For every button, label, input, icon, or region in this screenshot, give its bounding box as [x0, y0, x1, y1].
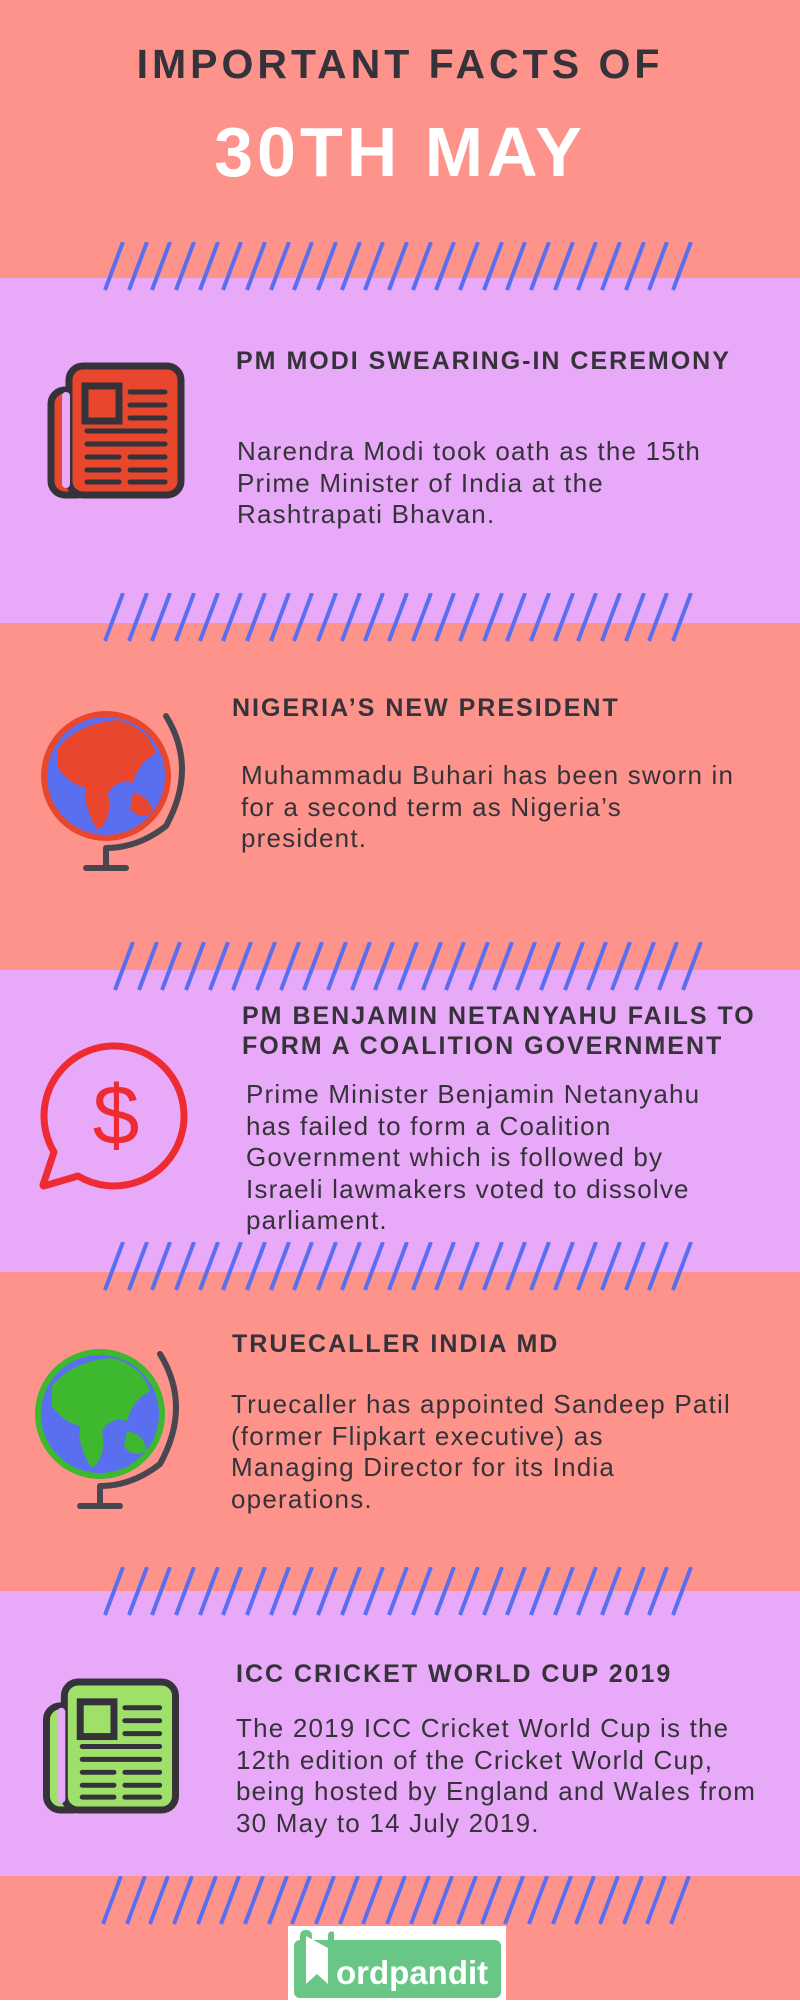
title line 1: IMPORTANT FACTS OF: [137, 41, 663, 87]
text: (former Flipkart executive) as: [231, 1420, 604, 1450]
panel: PM Modi: [48, 347, 731, 529]
text: has failed to form a Coalition: [246, 1110, 612, 1140]
text: [241, 760, 734, 853]
text: [236, 1713, 756, 1838]
text: [246, 1079, 700, 1235]
text: 30 May to 14 July 2019.: [236, 1808, 540, 1838]
panel: Nigeria: [41, 694, 734, 871]
title: [137, 41, 663, 191]
text: The 2019 ICC Cricket World Cup is the: [236, 1713, 729, 1743]
text: for a second term as Nigeria’s: [241, 792, 622, 822]
text: president.: [241, 823, 367, 853]
text: [237, 436, 701, 529]
text: Rashtrapati Bhavan.: [237, 499, 495, 529]
text: operations.: [231, 1484, 373, 1514]
text: Government which is followed by: [246, 1142, 663, 1172]
icon: newspaper green: [43, 1678, 179, 1814]
hatch divider 5: [103, 1567, 693, 1616]
text: Israeli lawmakers voted to dissolve: [246, 1174, 690, 1204]
icon: newspaper red: [48, 362, 184, 498]
logo: wordpandit: ordpandit: [336, 1954, 488, 1991]
hatch divider 2: [103, 593, 693, 642]
heading: NIGERIA’S NEW PRESIDENT: [232, 694, 620, 722]
text: parliament.: [246, 1205, 388, 1235]
text: Truecaller has appointed Sandeep Patil: [231, 1389, 731, 1419]
text: Prime Minister Benjamin Netanyahu: [246, 1079, 700, 1109]
text: Managing Director for its India: [231, 1452, 615, 1482]
heading: [242, 1002, 756, 1060]
text: [231, 1389, 731, 1514]
icon: dollar speech bubble: $: [93, 1068, 139, 1162]
text: being hosted by England and Wales from: [236, 1776, 756, 1806]
text: Narendra Modi took oath as the 15th: [237, 436, 701, 466]
icon: globe green: [35, 1349, 179, 1509]
hatch divider 1: [103, 242, 693, 291]
panel: ICC World Cup: [43, 1660, 756, 1838]
logo: wordpandit: [288, 1926, 506, 2000]
panel: Truecaller: [35, 1330, 731, 1514]
icon: globe red: [41, 711, 185, 871]
text: Prime Minister of India at the: [237, 468, 604, 498]
hatch divider 6: [101, 1876, 691, 1925]
hatch divider 4: [103, 1242, 693, 1291]
text: 12th edition of the Cricket World Cup,: [236, 1744, 713, 1774]
icon: dollar speech bubble: [40, 1042, 188, 1190]
heading: FORM A COALITION GOVERNMENT: [242, 1032, 723, 1060]
title date: 30TH MAY: [214, 113, 586, 191]
text: Muhammadu Buhari has been sworn in: [241, 760, 734, 790]
heading: TRUECALLER INDIA MD: [232, 1330, 559, 1358]
heading: PM BENJAMIN NETANYAHU FAILS TO: [242, 1002, 756, 1030]
heading: ICC CRICKET WORLD CUP 2019: [236, 1660, 672, 1688]
panel: Netanyahu: [40, 1002, 756, 1235]
heading: PM MODI SWEARING-IN CEREMONY: [236, 347, 731, 375]
hatch divider 3: [113, 942, 703, 991]
